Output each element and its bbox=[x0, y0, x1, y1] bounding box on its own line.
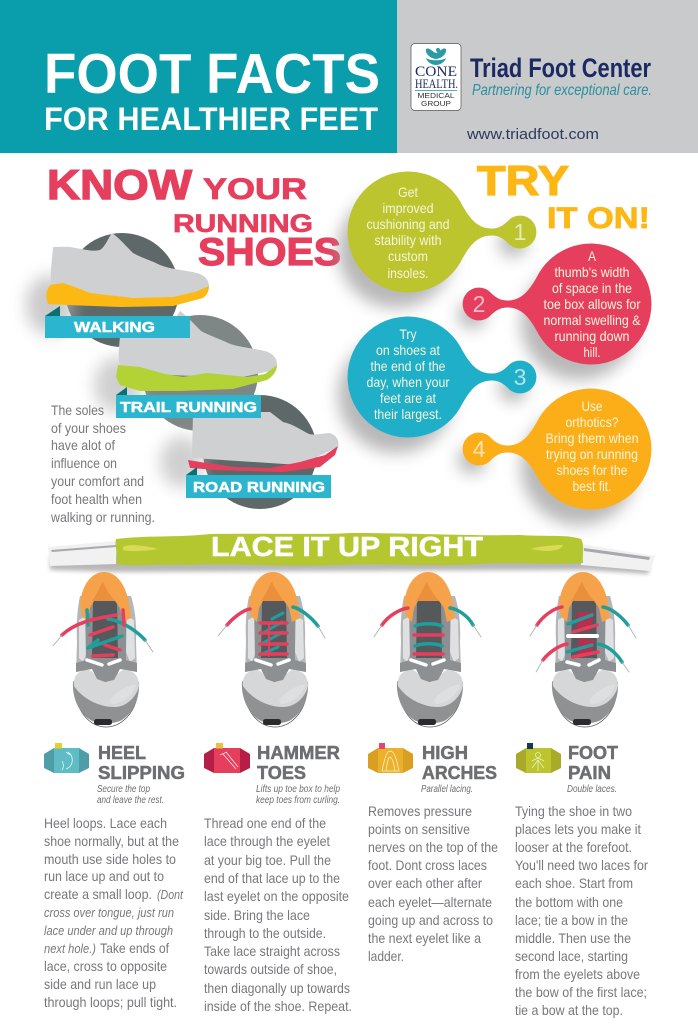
label: road running: ROAD RUNNING bbox=[193, 479, 325, 496]
banner: lace it up right bbox=[48, 531, 655, 574]
text: hammer toes instructions: Take lace straight across bbox=[204, 943, 340, 959]
title: Foot Facts: FOOT FACTS bbox=[44, 42, 380, 106]
badge: high arches bbox=[368, 739, 463, 773]
heading: foot pain bbox=[567, 743, 618, 795]
heading: know your running shoes: KNOW bbox=[47, 161, 192, 208]
text: foot pain instructions bbox=[515, 803, 648, 1018]
bubble 4: orthotics bbox=[458, 388, 651, 525]
bubble 3: end of the day: Try bbox=[400, 326, 416, 342]
heading: high arches bbox=[421, 743, 497, 795]
text: soles intro bbox=[50, 402, 155, 525]
text: soles intro: have alot of bbox=[51, 437, 115, 453]
text: hammer toes instructions: side. Bring the lace bbox=[204, 907, 310, 923]
bubble 2: thumb's width: of space in the bbox=[552, 280, 632, 296]
text: high arches instructions: the next eyelet like a bbox=[368, 930, 481, 946]
text: hammer toes instructions: Thread one end of the bbox=[204, 815, 326, 831]
text: heel slipping instructions: create a small loop. bbox=[44, 886, 152, 902]
text: high arches instructions: each eyelet—alternate bbox=[368, 894, 492, 910]
bubble 2: thumb's width: running down bbox=[554, 328, 630, 344]
shoe: walking bbox=[26, 233, 209, 347]
text: foot pain instructions: middle. Then use the bbox=[515, 930, 631, 946]
text: foot pain instructions: from the eyelets above bbox=[515, 966, 640, 982]
heading: hammer toes bbox=[256, 743, 340, 806]
section: know your running shoes bbox=[26, 161, 341, 525]
text: high arches instructions: Removes pressure bbox=[368, 803, 472, 819]
bubble 4: orthotics: 4 bbox=[473, 436, 486, 462]
text: hammer toes instructions: at your big toe. Pull the bbox=[204, 852, 331, 868]
text: heel slipping instructions: run lace up and out to bbox=[44, 868, 164, 884]
section: try it on bbox=[338, 157, 651, 525]
text: hammer toes instructions: inside of the shoe. Repeat. bbox=[204, 998, 352, 1014]
heading: heel slipping: Secure the top bbox=[97, 784, 150, 795]
bubble 2: thumb's width: hill. bbox=[584, 344, 600, 360]
bubble 4: orthotics: orthotics? bbox=[566, 414, 619, 430]
text: hammer toes instructions: then diagonally up towards bbox=[204, 980, 350, 996]
shoe lacing: hammer toes bbox=[218, 572, 325, 727]
text: foot pain instructions: the bottom with one bbox=[515, 894, 623, 910]
banner: lace it up right: LACE IT UP RIGHT bbox=[211, 531, 483, 562]
tagline: Partnering for exceptional care. bbox=[472, 82, 652, 99]
heading: try it on: IT ON! bbox=[547, 202, 650, 235]
header: teal title panel bbox=[0, 0, 397, 153]
bubble 1: custom insoles: custom bbox=[388, 248, 428, 264]
bubble 2: thumb's width: thumb's width bbox=[554, 264, 630, 280]
heading: high arches: ARCHES bbox=[422, 763, 497, 783]
heading: hammer toes: TOES bbox=[257, 763, 306, 783]
text: heel slipping instructions: next hole.) bbox=[44, 941, 96, 956]
bubble 1: custom insoles: stability with bbox=[374, 232, 442, 248]
heading: know your running shoes: YOUR bbox=[203, 173, 307, 206]
text: high arches instructions bbox=[368, 803, 498, 964]
label: trail running: TRAIL RUNNING bbox=[120, 399, 257, 416]
bubble 3: end of the day: their largest. bbox=[374, 406, 442, 422]
bubble 1: custom insoles bbox=[338, 172, 536, 308]
heading: hammer toes: Lifts up toe box to help bbox=[256, 784, 340, 795]
text: soles intro: foot health when bbox=[51, 491, 142, 507]
text: heel slipping instructions: (Dont bbox=[157, 887, 184, 902]
badge: foot pain bbox=[516, 739, 617, 773]
text: foot pain instructions: lace; tie a bow in the bbox=[515, 912, 628, 928]
text: high arches instructions: over each other after bbox=[368, 875, 482, 891]
text: foot pain instructions: the bow of the first lace; bbox=[515, 984, 647, 1000]
website: www.triadfoot.com bbox=[466, 126, 599, 143]
bubble 2: thumb's width bbox=[458, 244, 651, 380]
heading: know your running shoes: RUNNING bbox=[173, 210, 313, 238]
heading: hammer toes: keep toes from curling. bbox=[256, 795, 340, 806]
text: high arches instructions: points on sensitive bbox=[368, 821, 470, 837]
bubble 4: orthotics: trying on running bbox=[546, 446, 638, 462]
bubble 2: thumb's width: normal swelling & bbox=[544, 312, 641, 328]
bubble 3: end of the day bbox=[338, 316, 536, 453]
text: high arches instructions: ladder. bbox=[368, 948, 404, 964]
text: soles intro: influence on bbox=[51, 455, 117, 471]
text: high arches instructions: foot. Dont cross laces bbox=[368, 857, 487, 873]
text: hammer toes instructions: end of that lace up to the bbox=[204, 870, 340, 886]
column 3: high arches bbox=[368, 572, 498, 964]
bubble 4: orthotics: Bring them when bbox=[546, 430, 638, 446]
logo: Cone Health Medical Group: CONE bbox=[415, 64, 457, 80]
text: foot pain instructions: looser at the forefoot. bbox=[515, 839, 632, 855]
text: heel slipping instructions: Take ends of bbox=[100, 940, 169, 956]
text: foot pain instructions: each shoe. Start from bbox=[515, 875, 633, 891]
text: heel slipping instructions: mouth use side holes to bbox=[44, 851, 176, 867]
heading: high arches: Parallel lacing. bbox=[421, 784, 473, 795]
text: heel slipping instructions bbox=[44, 815, 184, 1010]
shoe lacing: foot pain bbox=[530, 572, 636, 727]
shoe lacing: high arches bbox=[374, 572, 481, 727]
bubble 2: thumb's width: toe box allows for bbox=[544, 296, 641, 312]
column 1: heel slipping bbox=[44, 572, 185, 1010]
text: soles intro: your comfort and bbox=[51, 473, 144, 489]
text: foot pain instructions: tie a bow at the top. bbox=[515, 1002, 623, 1018]
text: foot pain instructions: places lets you make it bbox=[515, 821, 641, 837]
logo: Cone Health Medical Group: GROUP bbox=[421, 99, 451, 108]
heading: foot pain: Double laces. bbox=[567, 784, 617, 795]
bubble 2: thumb's width: 2 bbox=[473, 291, 485, 317]
heading: heel slipping: and leave the rest. bbox=[97, 795, 164, 806]
text: hammer toes instructions: towards outside of shoe, bbox=[204, 961, 337, 977]
bubble 3: end of the day: feet are at bbox=[380, 390, 436, 406]
text: hammer toes instructions: lace through the eyelet bbox=[204, 833, 330, 849]
heading: heel slipping bbox=[97, 743, 185, 806]
heading: know your running shoes bbox=[47, 161, 341, 274]
bubble 3: end of the day: 3 bbox=[514, 364, 526, 390]
bubble 4: orthotics: shoes for the bbox=[556, 462, 628, 478]
text: high arches instructions: nerves on the top of the bbox=[368, 839, 498, 855]
heading: foot pain: FOOT bbox=[568, 743, 618, 763]
heading: know your running shoes: SHOES bbox=[198, 231, 341, 274]
text: hammer toes instructions: last eyelet on the opposite bbox=[204, 888, 349, 904]
text: heel slipping instructions: side and run lace up bbox=[44, 976, 156, 992]
bubble 4: orthotics: Use bbox=[582, 398, 603, 414]
column 4: foot pain bbox=[515, 572, 648, 1018]
heading: heel slipping: HEEL bbox=[98, 743, 146, 763]
header: grey logo panel bbox=[397, 0, 698, 153]
logo: Cone Health Medical Group: HEALTH. bbox=[415, 76, 458, 91]
text: heel slipping instructions: lace under and up through bbox=[44, 923, 173, 938]
shoe: trail running bbox=[94, 311, 277, 431]
text: soles intro: of your shoes bbox=[51, 420, 126, 436]
heading: try it on: TRY bbox=[477, 157, 569, 204]
logo: Cone Health Medical Group bbox=[411, 44, 461, 110]
text: heel slipping instructions: shoe normally, but at the bbox=[44, 833, 179, 849]
text: heel slipping instructions: cross over tongue, just run bbox=[44, 905, 174, 920]
bubble 1: custom insoles: insoles. bbox=[388, 265, 428, 281]
bubble 3: end of the day: day, when your bbox=[366, 374, 450, 390]
badge: hammer toes bbox=[204, 739, 307, 773]
text: high arches instructions: going up and across to bbox=[368, 912, 493, 928]
bubble 4: orthotics: best fit. bbox=[572, 478, 612, 494]
column 2: hammer toes bbox=[204, 572, 352, 1014]
shoe lacing: heel slipping bbox=[53, 572, 153, 727]
bubble 3: end of the day: the end of the bbox=[370, 358, 446, 374]
text: hammer toes instructions: through to the outside. bbox=[204, 925, 326, 941]
heading: try it on bbox=[477, 157, 650, 235]
badge: heel slipping bbox=[44, 739, 126, 773]
bubble 2: thumb's width: A bbox=[588, 248, 597, 264]
text: hammer toes instructions bbox=[204, 815, 352, 1014]
text: foot pain instructions: Tying the shoe in two bbox=[515, 803, 632, 819]
bubble 1: custom insoles: cushioning and bbox=[366, 216, 450, 232]
subtitle: For Healthier Feet: FOR HEALTHIER FEET bbox=[44, 101, 378, 137]
shoe: road running bbox=[160, 395, 338, 509]
text: heel slipping instructions: through loops; pull tight. bbox=[44, 994, 177, 1010]
text: heel slipping instructions: Heel loops. Lace each bbox=[44, 815, 167, 831]
text: soles intro: The soles bbox=[51, 402, 104, 418]
heading: hammer toes: HAMMER bbox=[257, 743, 340, 763]
heading: heel slipping: SLIPPING bbox=[98, 763, 185, 783]
heading: high arches: HIGH bbox=[422, 743, 468, 763]
heading: foot pain: PAIN bbox=[568, 763, 611, 783]
label: walking: WALKING bbox=[74, 319, 155, 336]
bubble 3: end of the day: on shoes at bbox=[376, 342, 440, 358]
text: foot pain instructions: You'll need two laces for bbox=[515, 857, 648, 873]
text: foot pain instructions: second lace, starting bbox=[515, 948, 628, 964]
bubble 1: custom insoles: 1 bbox=[514, 219, 526, 245]
logo: Cone Health Medical Group: MEDICAL bbox=[418, 91, 454, 100]
text: heel slipping instructions: lace, cross to opposite bbox=[44, 958, 167, 974]
label: trail running bbox=[116, 387, 261, 418]
brand name: Triad Foot Center bbox=[470, 53, 651, 83]
label: road running bbox=[186, 467, 331, 498]
label: walking bbox=[45, 306, 190, 338]
bubble 1: custom insoles: Get bbox=[398, 184, 418, 200]
text: soles intro: walking or running. bbox=[50, 509, 155, 525]
bubble 1: custom insoles: improved bbox=[382, 200, 434, 216]
